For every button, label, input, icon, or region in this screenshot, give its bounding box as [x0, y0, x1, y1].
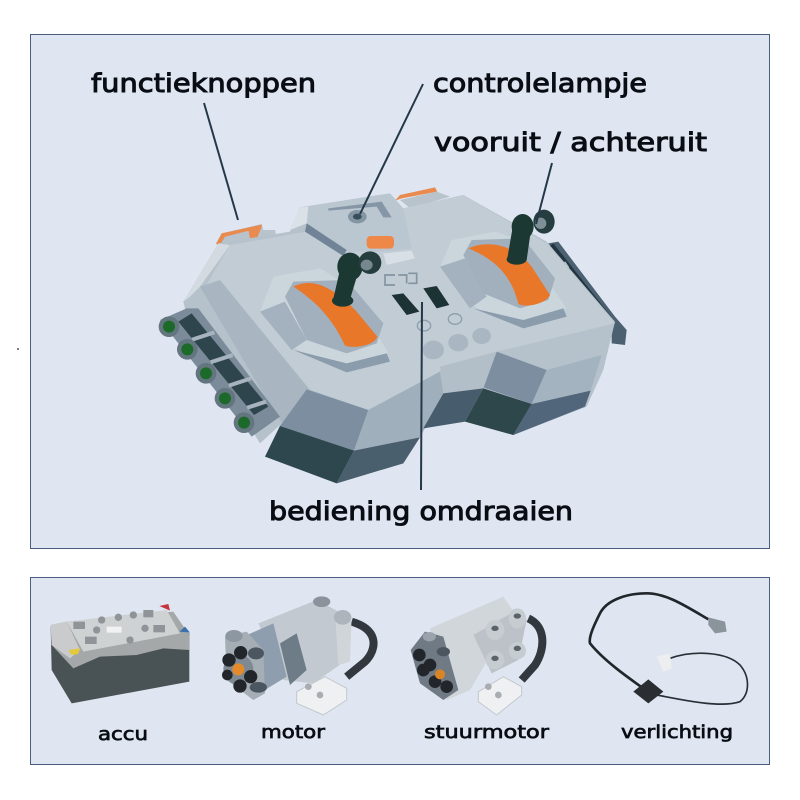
left side connector — [159, 308, 280, 437]
logo — [385, 273, 417, 285]
body base — [183, 193, 615, 483]
left joystick — [332, 251, 381, 307]
right joystick well — [440, 232, 567, 328]
orange button — [367, 236, 394, 249]
dark bottom — [265, 426, 354, 483]
lower faces — [280, 389, 368, 451]
panel: accessories — [30, 578, 770, 764]
icon: motor — [222, 596, 374, 715]
label: stuurmotor: stuurmotor — [424, 722, 550, 743]
label: vooruit / achteruit: vooruit / achteruit — [434, 128, 707, 158]
leader line: forward / backward — [536, 163, 552, 224]
item: accu — [51, 604, 190, 745]
label: verlichting: verlichting — [621, 722, 733, 743]
leader line: indicator lamp — [360, 84, 423, 214]
right joystick — [507, 210, 555, 265]
icon: steering motor — [411, 597, 542, 715]
right side connector — [547, 242, 627, 345]
illustration: remote control — [159, 187, 627, 483]
label: functieknoppen: functieknoppen — [91, 69, 316, 99]
icon: battery box — [51, 604, 190, 703]
label: bediening omdraaien: bediening omdraaien — [269, 497, 573, 527]
reverse switches — [392, 286, 462, 331]
left joystick well — [260, 268, 390, 372]
item: stuurmotor — [411, 597, 550, 743]
label: controlelampje: controlelampje — [433, 69, 647, 99]
studs — [423, 328, 491, 359]
label: accu: accu — [98, 724, 148, 745]
centre raised piece — [290, 193, 412, 252]
item: motor — [222, 596, 374, 743]
indicator lamp — [348, 210, 367, 223]
panel: main controller — [30, 34, 770, 548]
leader line: reverse control — [421, 302, 422, 490]
leader line: function buttons — [204, 103, 238, 220]
item: verlichting — [590, 593, 747, 743]
top faces — [203, 195, 615, 410]
icon: light cable — [590, 593, 747, 704]
function buttons — [216, 187, 450, 247]
label: motor: motor — [261, 722, 326, 743]
